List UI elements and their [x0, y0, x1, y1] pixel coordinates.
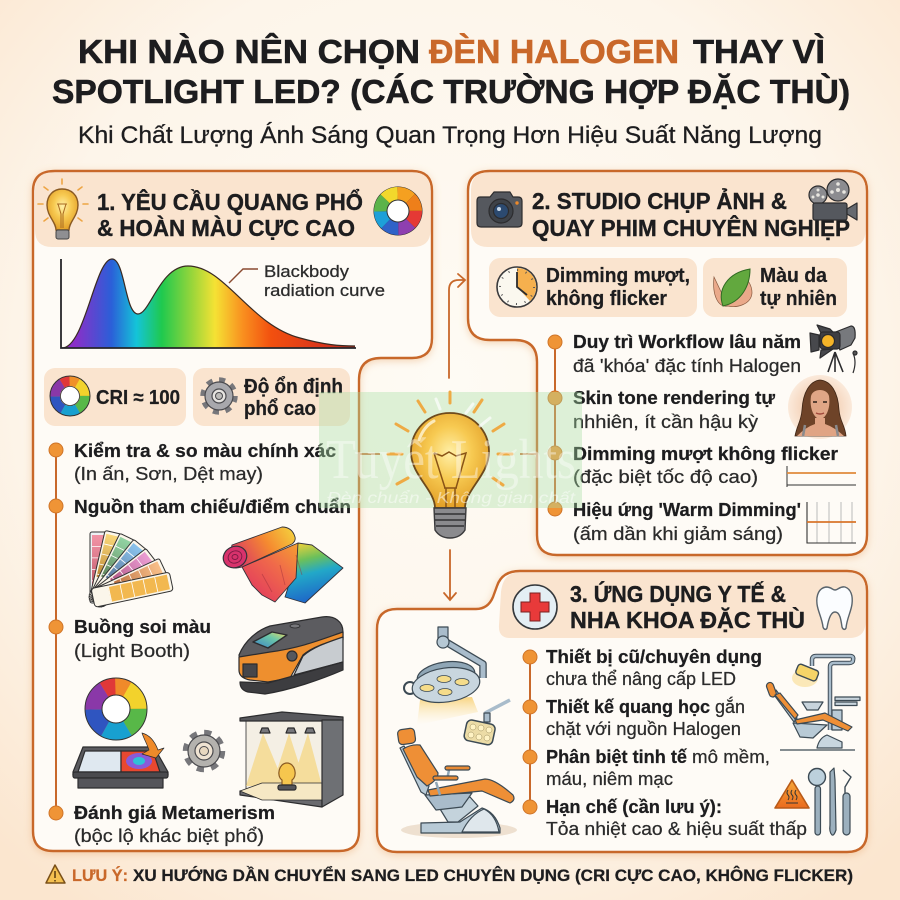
icon: camera — [477, 192, 522, 227]
pill: dimming: không flicker — [546, 288, 667, 310]
icon: spectrophotometer — [239, 617, 343, 694]
watermark panel — [319, 392, 582, 508]
text: optical design: chặt với nguồn Halogen — [546, 719, 741, 739]
title: KHI NÀO NÊN CHỌN — [78, 33, 420, 70]
arrow: to panel 2 — [449, 274, 465, 378]
text: optical design: Thiết kế quang học — [546, 697, 710, 717]
text: light booth: Buồng soi màu — [74, 617, 211, 637]
text: skin tone: nhhiên, ít cần hậu kỳ — [573, 412, 758, 432]
text: dimming: (đặc biệt tốc độ cao) — [573, 467, 758, 487]
icon: heat warning — [775, 780, 809, 808]
arrow: to panel 3 — [444, 550, 456, 600]
icon: light bulb — [38, 179, 88, 239]
text: skin tone: Skin tone rendering tự — [573, 388, 776, 408]
panel: 1 spectrum and colour rendering — [33, 171, 432, 851]
chart: blackbody spectrum: radiation curve — [264, 282, 385, 300]
chart: warm dimming line — [807, 502, 856, 543]
text: optical design: gắn — [715, 696, 745, 717]
icon: dental tools — [808, 768, 851, 835]
pill: CRI: CRI ≈ 100 — [96, 387, 180, 409]
heading 3 — [570, 580, 805, 633]
icon: small dental unit — [766, 656, 860, 750]
chart: flicker free line — [787, 466, 856, 487]
watermark text — [326, 399, 576, 507]
panel: 2 studio — [468, 171, 867, 555]
pill: spectrum stability: Độ ổn định — [244, 376, 343, 398]
heading 3: NHA KHOA ĐẶC THÙ — [570, 606, 805, 633]
text: limitations: Tỏa nhiệt cao & hiệu suất thấp — [546, 819, 807, 839]
text: tissue distinction: máu, niêm mạc — [546, 769, 673, 789]
subtitle: Khi Chất Lượng Ánh Sáng Quan Trọng Hơn Hiệu Suất Năng Lượng — [78, 122, 822, 149]
chart: blackbody spectrum — [61, 259, 385, 348]
timeline 3 — [523, 650, 537, 814]
header band 1 — [35, 172, 430, 247]
icon: large colour wheel — [85, 678, 147, 740]
connector: left and right of bulb — [359, 453, 537, 455]
text: legacy equipment — [546, 647, 762, 689]
heading 2: QUAY PHIM CHUYÊN NGHIỆP — [532, 214, 850, 241]
text: tissue distinction: Phân biệt tinh tế — [546, 747, 688, 767]
icon: central halogen bulb — [388, 392, 512, 538]
icon: viewing booth — [240, 712, 343, 807]
text: legacy equipment: chưa thể nâng cấp LED — [546, 669, 736, 689]
icon: film camera — [809, 179, 857, 220]
footer note: XU HƯỚNG DẦN CHUYỂN SANG LED CHUYÊN DỤNG (CRI CỰC CAO, KHÔNG FLICKER) — [133, 866, 853, 885]
pill: spectrum stability: phổ cao — [244, 398, 316, 420]
text: skin tone — [573, 388, 776, 432]
text: warm dimming — [573, 500, 801, 544]
pill: CRI — [44, 368, 186, 426]
pill: dimming: Dimming mượt, — [546, 265, 690, 287]
title: THAY VÌ — [693, 33, 825, 70]
timeline 1 — [49, 443, 63, 820]
text: reference source: Nguồn tham chiếu/điểm chuẩn — [74, 497, 351, 517]
icon: dental chair — [397, 728, 517, 838]
text: legacy equipment: Thiết bị cũ/chuyên dụng — [546, 647, 762, 667]
text: workflow: Duy trì Workflow lâu năm — [573, 332, 801, 352]
icon: fabric roll — [220, 527, 343, 603]
text: colour checking: Kiểm tra & so màu chính xác — [74, 441, 336, 461]
icon: warning triangle — [46, 865, 65, 883]
icon: colour fan deck — [88, 530, 173, 608]
text: warm dimming: (ấm dần khi giảm sáng) — [573, 524, 783, 544]
text: workflow: đã 'khóa' đặc tính Halogen — [573, 356, 801, 376]
timeline 2 — [548, 335, 562, 516]
pill: skin colour: Màu da — [760, 265, 828, 287]
watermark text: Đèn chuẩn - Không gian chất — [327, 489, 576, 507]
text: metamerism — [74, 803, 275, 846]
heading 2: 2. STUDIO CHỤP ẢNH & — [532, 186, 787, 214]
text: light booth: (Light Booth) — [74, 641, 190, 661]
text: tissue distinction — [546, 747, 770, 789]
text: dimming — [573, 444, 838, 487]
header band 3 — [499, 572, 866, 638]
pill: skin colour — [703, 258, 847, 317]
icon: gear — [186, 733, 222, 769]
text: optical design — [546, 696, 745, 739]
text: metamerism: (bộc lộ khác biệt phổ) — [74, 826, 264, 846]
footer note: LƯU Ý: — [72, 866, 128, 885]
icon: tooth — [817, 587, 852, 629]
icon: small dental lamp — [463, 700, 510, 746]
chart: blackbody spectrum: Blackbody — [264, 263, 350, 281]
header band 2 — [471, 172, 866, 247]
icon: surgical lamp — [404, 627, 483, 725]
pill: skin colour: tự nhiên — [760, 288, 837, 310]
heading 2 — [532, 186, 850, 241]
icon: studio light — [810, 325, 857, 373]
text: tissue distinction: mô mềm, — [692, 747, 770, 767]
watermark text: Tuyết Lights — [326, 429, 576, 491]
heading 1 — [97, 188, 363, 241]
text: metamerism: Đánh giá Metamerism — [74, 803, 275, 823]
icon: colour wheel — [374, 186, 422, 236]
icon: viewing device — [73, 733, 168, 788]
title: SPOTLIGHT LED? (CÁC TRƯỜNG HỢP ĐẶC THÙ) — [52, 73, 850, 110]
pill: dimming — [489, 258, 697, 317]
icon: medical cross — [513, 585, 557, 629]
heading 3: 3. ỨNG DỤNG Y TẾ & — [570, 580, 786, 607]
text: light booth — [74, 617, 211, 661]
text: colour checking: (In ấn, Sơn, Dệt may) — [74, 464, 263, 484]
text: limitations: Hạn chế (cần lưu ý): — [546, 797, 722, 817]
text: limitations — [546, 797, 807, 839]
panel: 3 medical and dental — [377, 571, 867, 852]
pill: spectrum stability — [193, 368, 350, 426]
icon: woman portrait — [788, 375, 852, 439]
text: dimming: Dimming mượt không flicker — [573, 444, 838, 464]
heading 1: 1. YÊU CẦU QUANG PHỔ — [97, 188, 363, 215]
text: workflow — [573, 332, 801, 376]
text: colour checking — [74, 441, 336, 484]
title: ĐÈN HALOGEN — [429, 33, 679, 70]
text: warm dimming: Hiệu ứng 'Warm Dimming' — [573, 500, 801, 520]
heading 1: & HOÀN MÀU CỰC CAO — [97, 214, 355, 241]
title — [52, 33, 850, 110]
